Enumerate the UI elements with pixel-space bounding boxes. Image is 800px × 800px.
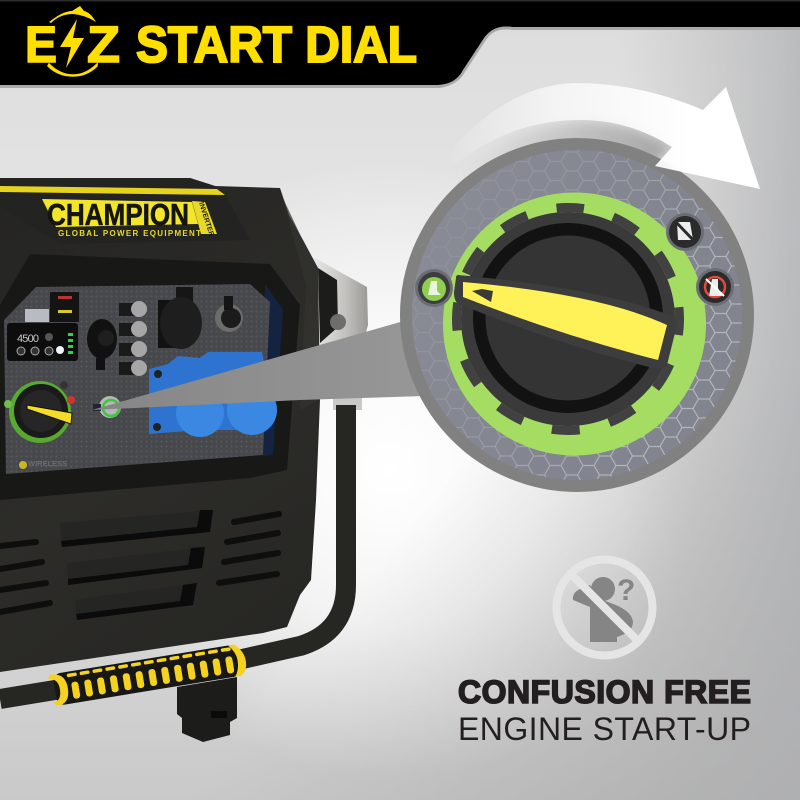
brand logo: INVERTER	[197, 201, 215, 237]
display	[7, 323, 78, 361]
caption	[458, 674, 751, 747]
front panel frame	[0, 254, 300, 500]
yellow grip handle	[47, 643, 248, 707]
magnified dial callout	[400, 138, 754, 492]
header banner	[0, 0, 800, 88]
dial pointer	[454, 275, 677, 368]
heading: START DIAL	[136, 16, 417, 73]
logo: EZ start bolt: Z	[87, 16, 120, 73]
generator body	[0, 178, 320, 672]
knob	[456, 208, 680, 430]
right vents	[219, 514, 279, 583]
wireless label: WIRELESS	[28, 459, 67, 468]
caption: CONFUSION FREE	[458, 674, 751, 710]
left vents	[0, 542, 50, 612]
brand logo: GLOBAL POWER EQUIPMENT	[58, 229, 201, 238]
display: 4500	[17, 333, 39, 345]
zoom cone	[92, 315, 425, 410]
warning labels	[50, 292, 79, 322]
blue outlets	[149, 352, 277, 437]
brand logo: CHAMPION	[47, 197, 189, 232]
logo: EZ start bolt	[25, 6, 120, 76]
icon: no confusion	[556, 560, 652, 656]
icon: choke	[415, 269, 453, 307]
socket	[158, 287, 202, 349]
small socket	[215, 296, 243, 332]
breakers	[119, 301, 147, 376]
icon: fuel off	[666, 213, 704, 251]
generator bracket	[313, 257, 368, 410]
centre vents	[60, 510, 213, 620]
green ring	[443, 192, 706, 456]
12V outlet	[87, 319, 117, 370]
generator frame tube	[0, 405, 346, 699]
generator foot	[177, 677, 237, 742]
logo: EZ start bolt: E	[25, 16, 57, 73]
rotate arrow	[445, 83, 760, 189]
person: ?	[617, 574, 635, 607]
small start dial	[4, 381, 75, 443]
shield label	[25, 309, 49, 322]
icon: engine off	[696, 268, 734, 306]
indicator button	[93, 396, 121, 418]
caption: ENGINE START-UP	[458, 711, 751, 747]
control panel	[4, 284, 277, 474]
arrow shadow	[450, 122, 672, 190]
